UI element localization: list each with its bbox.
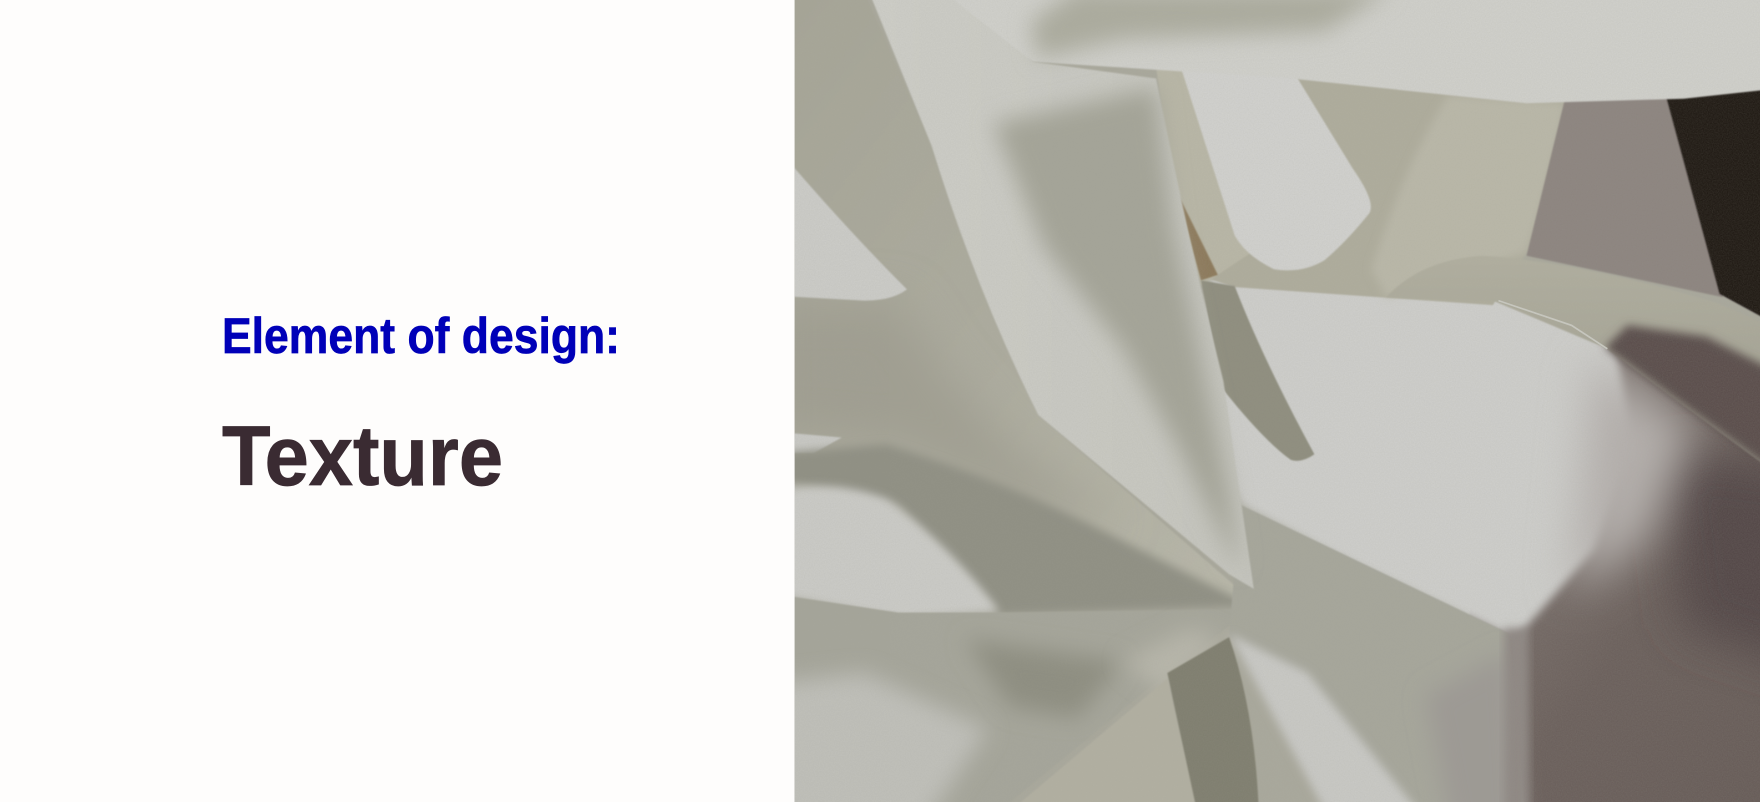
subtitle: Element of design: Element of design: xyxy=(222,308,620,364)
dropped flap and seam xyxy=(1392,256,1760,462)
right lower fabric, base shadow xyxy=(1472,358,1760,802)
central strip xyxy=(859,0,1254,589)
top band xyxy=(954,0,1760,103)
fabric grain xyxy=(1576,92,1760,789)
background panel xyxy=(0,0,795,802)
title: Texture: Texture xyxy=(222,409,503,503)
cream upper section xyxy=(1211,266,1496,306)
large white panel xyxy=(1190,269,1633,639)
lower middle fabric xyxy=(1229,505,1527,802)
photo: draped white fabric xyxy=(763,0,1760,802)
bottom folds xyxy=(1136,706,1156,716)
olive leaf xyxy=(1201,280,1314,461)
